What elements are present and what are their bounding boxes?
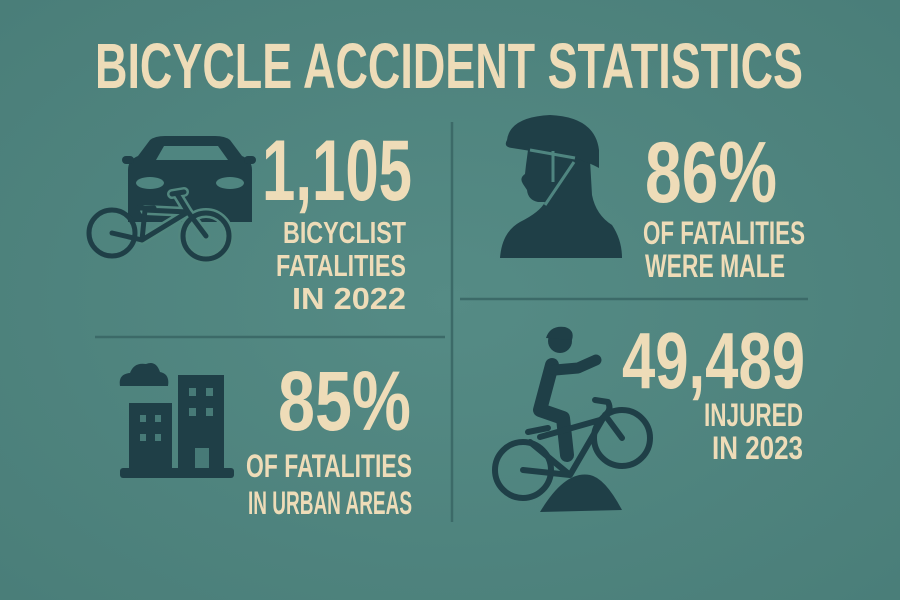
stat label: BICYCLIST — [283, 215, 406, 250]
icon: buildings and cloud — [120, 363, 234, 478]
stat label: IN URBAN AREAS — [248, 485, 412, 521]
stat label: OF FATALITIES — [643, 215, 805, 251]
stat number: 85% — [278, 354, 411, 448]
panel: male fatalities — [500, 115, 805, 284]
stat label — [704, 397, 803, 466]
icon: helmeted head — [500, 115, 622, 258]
stat number: 86% — [645, 125, 777, 221]
stat label: WERE MALE — [645, 248, 785, 284]
stat label: FATALITIES — [276, 248, 406, 283]
icon: car and bicycle — [89, 136, 256, 259]
stat number: 49,489 — [622, 316, 805, 405]
stat label: INJURED — [704, 397, 803, 433]
panel: urban areas — [120, 354, 412, 521]
icon: cyclist on bump — [495, 327, 650, 512]
stat label: IN 2022 — [292, 281, 406, 316]
stat label — [643, 215, 805, 284]
stat label — [246, 448, 412, 521]
stat label: IN 2023 — [712, 430, 803, 466]
stat label — [276, 215, 406, 316]
stat number: 1,105 — [262, 123, 412, 219]
panel: fatalities 2022 — [89, 123, 412, 316]
panel: injured 2023 — [495, 316, 805, 512]
stat label: OF FATALITIES — [246, 448, 412, 484]
